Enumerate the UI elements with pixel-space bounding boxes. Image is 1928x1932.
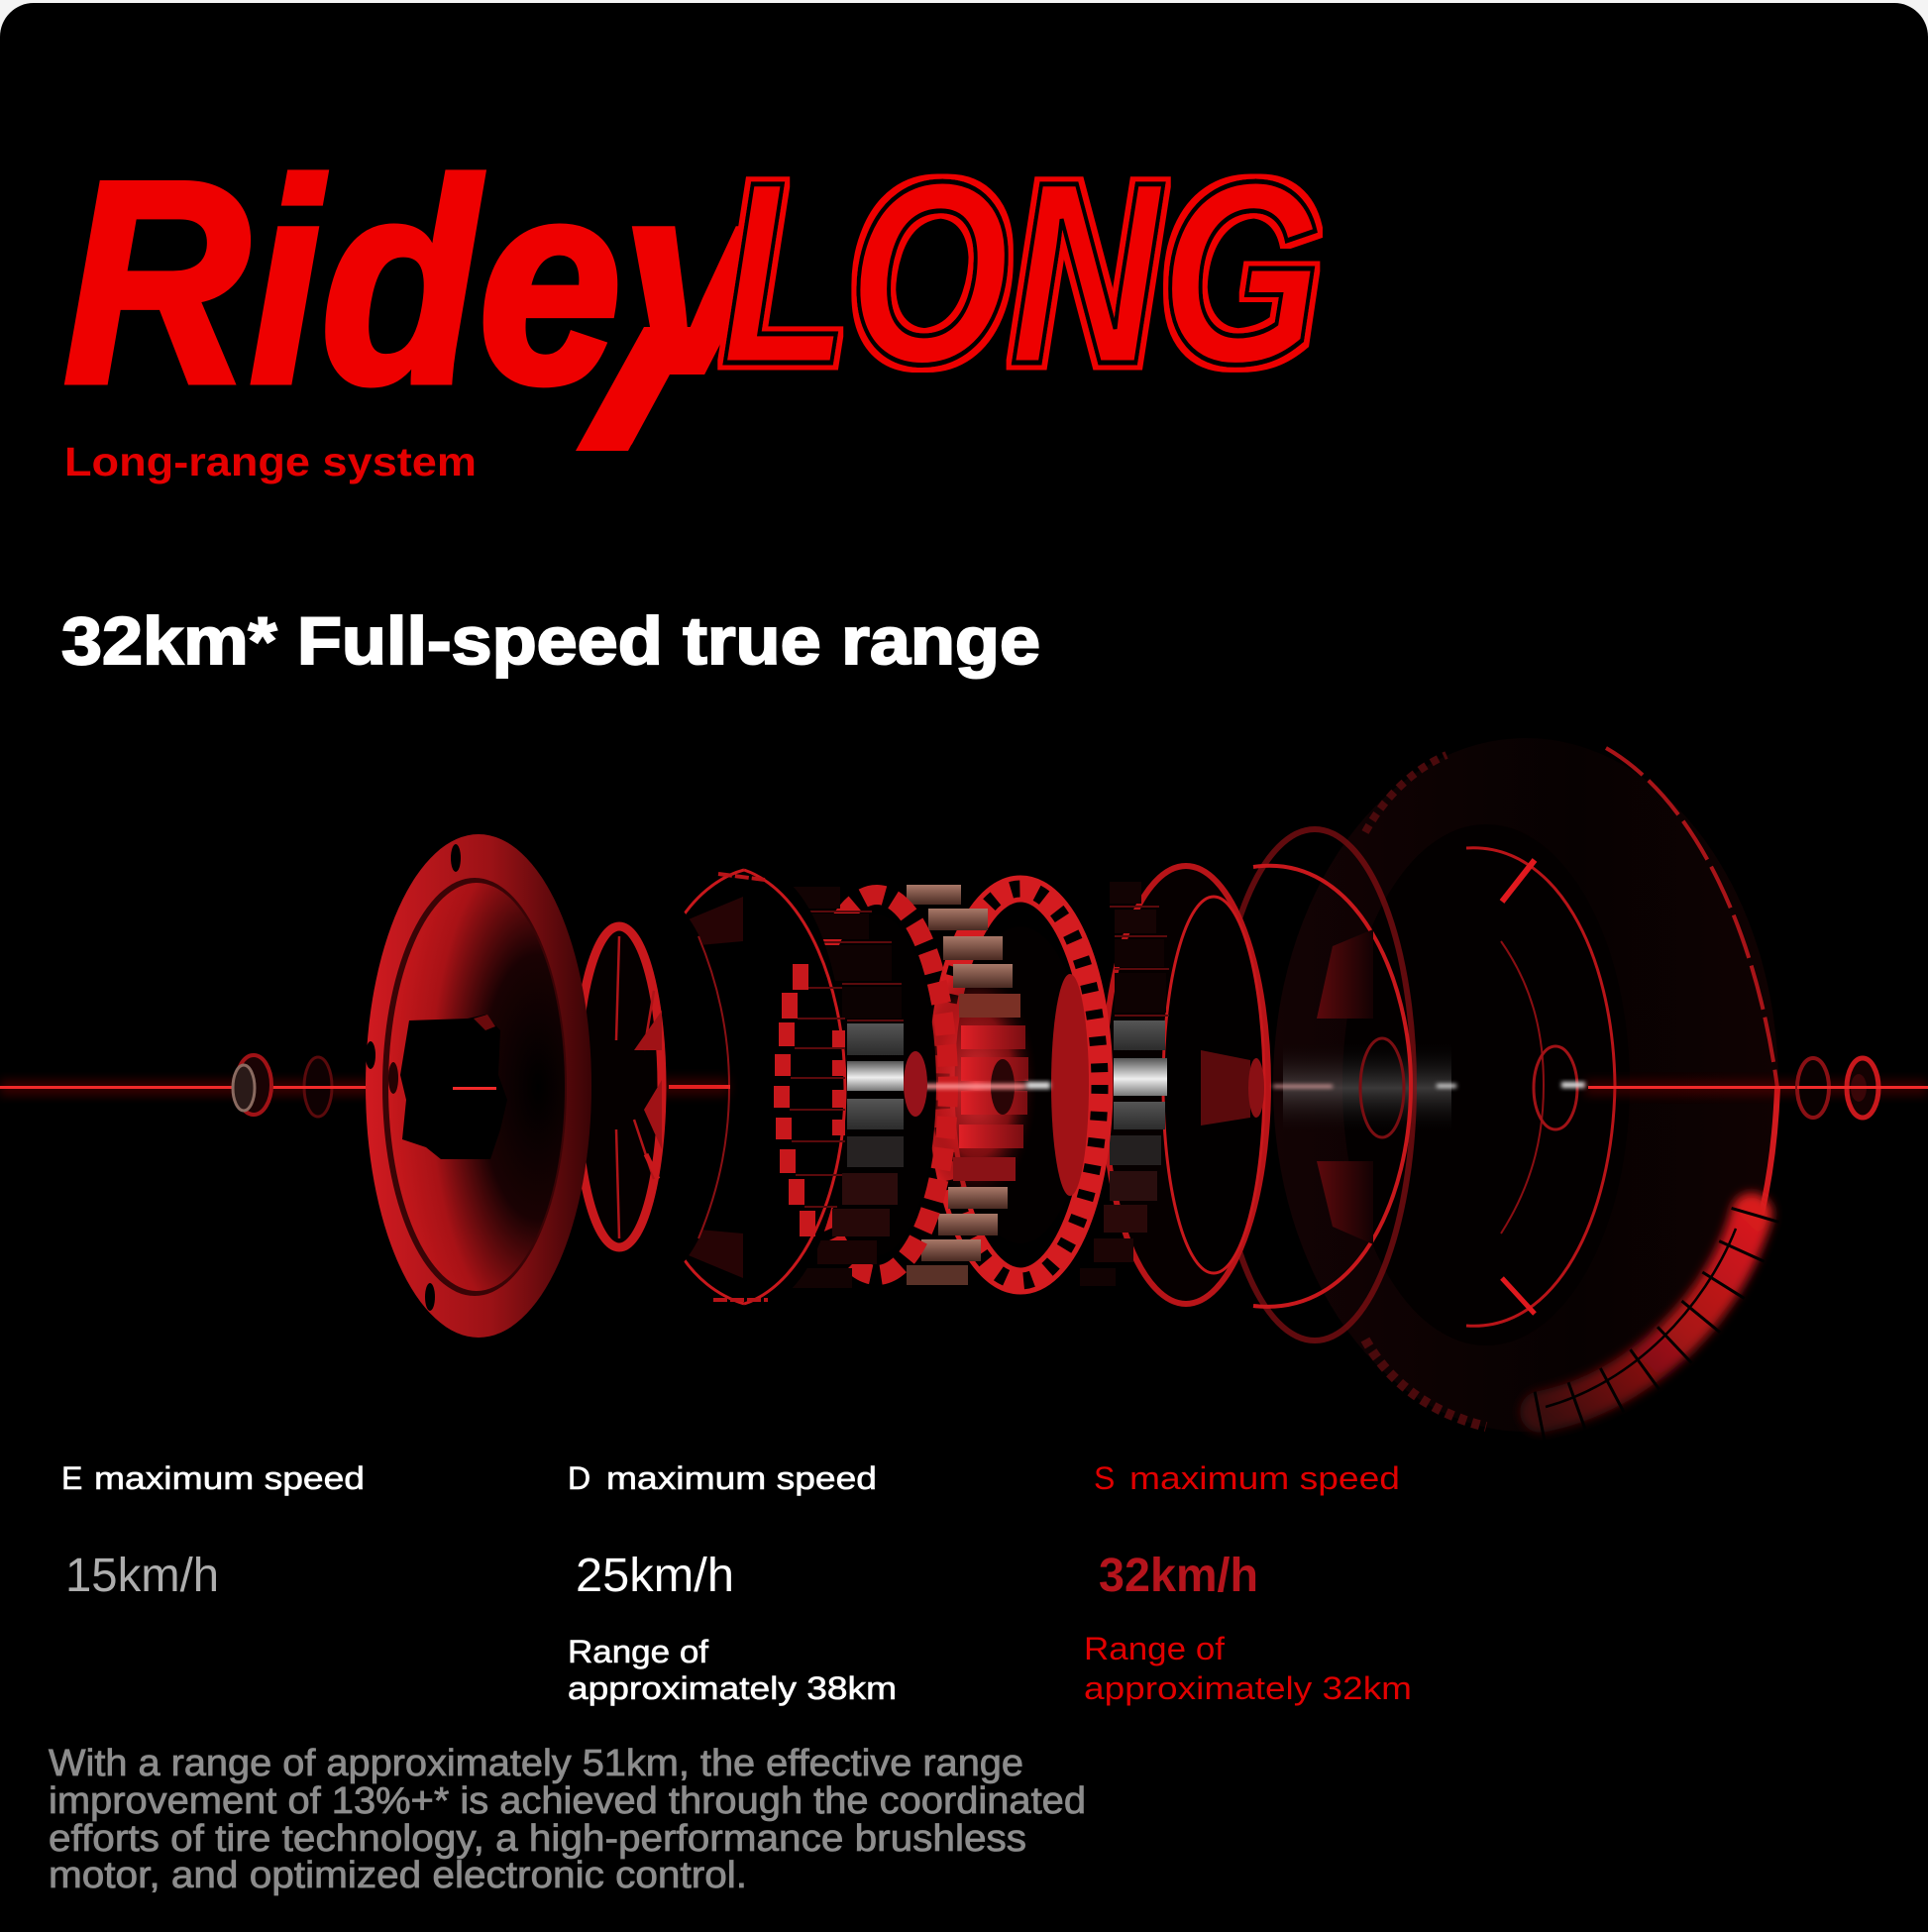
icon: stator cover ring [1104,866,1268,1304]
icon: slotted stator ring [928,877,1113,1293]
metal hub sheen [1283,1040,1451,1135]
icon: inner cylinder [559,889,730,1285]
stator teeth blocks [774,964,845,1236]
description paragraph [49,1743,1086,1896]
speed column: E mode [61,1460,365,1602]
heading: full-speed range: 32km* Full-speed true range [61,603,1040,679]
description paragraph: efforts of tire technology, a high-performance brushless [49,1818,1026,1860]
axis laser line [0,1080,376,1096]
value: 32km/h [1099,1550,1258,1602]
subtitle: long-range system: Long-range system [64,439,477,484]
stator tooth rows [790,988,845,1207]
icon: motor housing ring [1216,829,1414,1341]
tire tread glow [1541,1214,1752,1412]
description paragraph: With a range of approximately 51km, the effective range [49,1743,1023,1784]
axis chrome highlights [907,1082,1585,1089]
icon: right axis and washers [1585,1058,1928,1118]
motor hub block [400,1015,507,1159]
speed column: S mode [1084,1460,1412,1706]
label: D [568,1460,590,1496]
value: 15km/h [65,1550,219,1602]
range note: Range of [568,1634,708,1669]
icon: tire [1273,738,1778,1432]
icon: toothed ring [805,895,948,1275]
description paragraph: motor, and optimized electronic control. [49,1855,747,1896]
label: maximum speed [606,1460,877,1496]
icon: left washers [233,1055,365,1117]
speed column: D mode [568,1460,897,1706]
icon: motor end cap disc [366,834,591,1338]
speed column: S mode: approximately 32km [1084,1670,1412,1706]
icon: spoked ring [577,926,662,1247]
label: S [1094,1460,1115,1496]
icon: stator front disc with teeth [674,870,846,1304]
logo y tail [576,327,696,451]
description paragraph: improvement of 13%+* is achieved through the coordinated [49,1780,1086,1822]
icon: right magnet blocks [1080,882,1169,1286]
motor exploded view illustration [0,738,1928,1432]
value: 25km/h [576,1550,734,1602]
tire upper rim highlight [1606,748,1777,1088]
logo word: Ridey: Ridey [63,122,779,444]
label: maximum speed [94,1460,365,1496]
speed column: D mode: approximately 38km [568,1670,897,1706]
icon: copper gear teeth [907,885,1028,1285]
range note: Range of [1084,1631,1225,1666]
icon: wheel rim [1466,848,1615,1326]
icon: gear core glow [914,966,1037,1204]
title: RideyLONG logo [63,122,1322,468]
label: E [61,1460,82,1496]
logo word: LONG: LONG [721,128,1322,418]
label: maximum speed [1129,1460,1400,1496]
icon: left magnet blocks [793,887,927,1288]
